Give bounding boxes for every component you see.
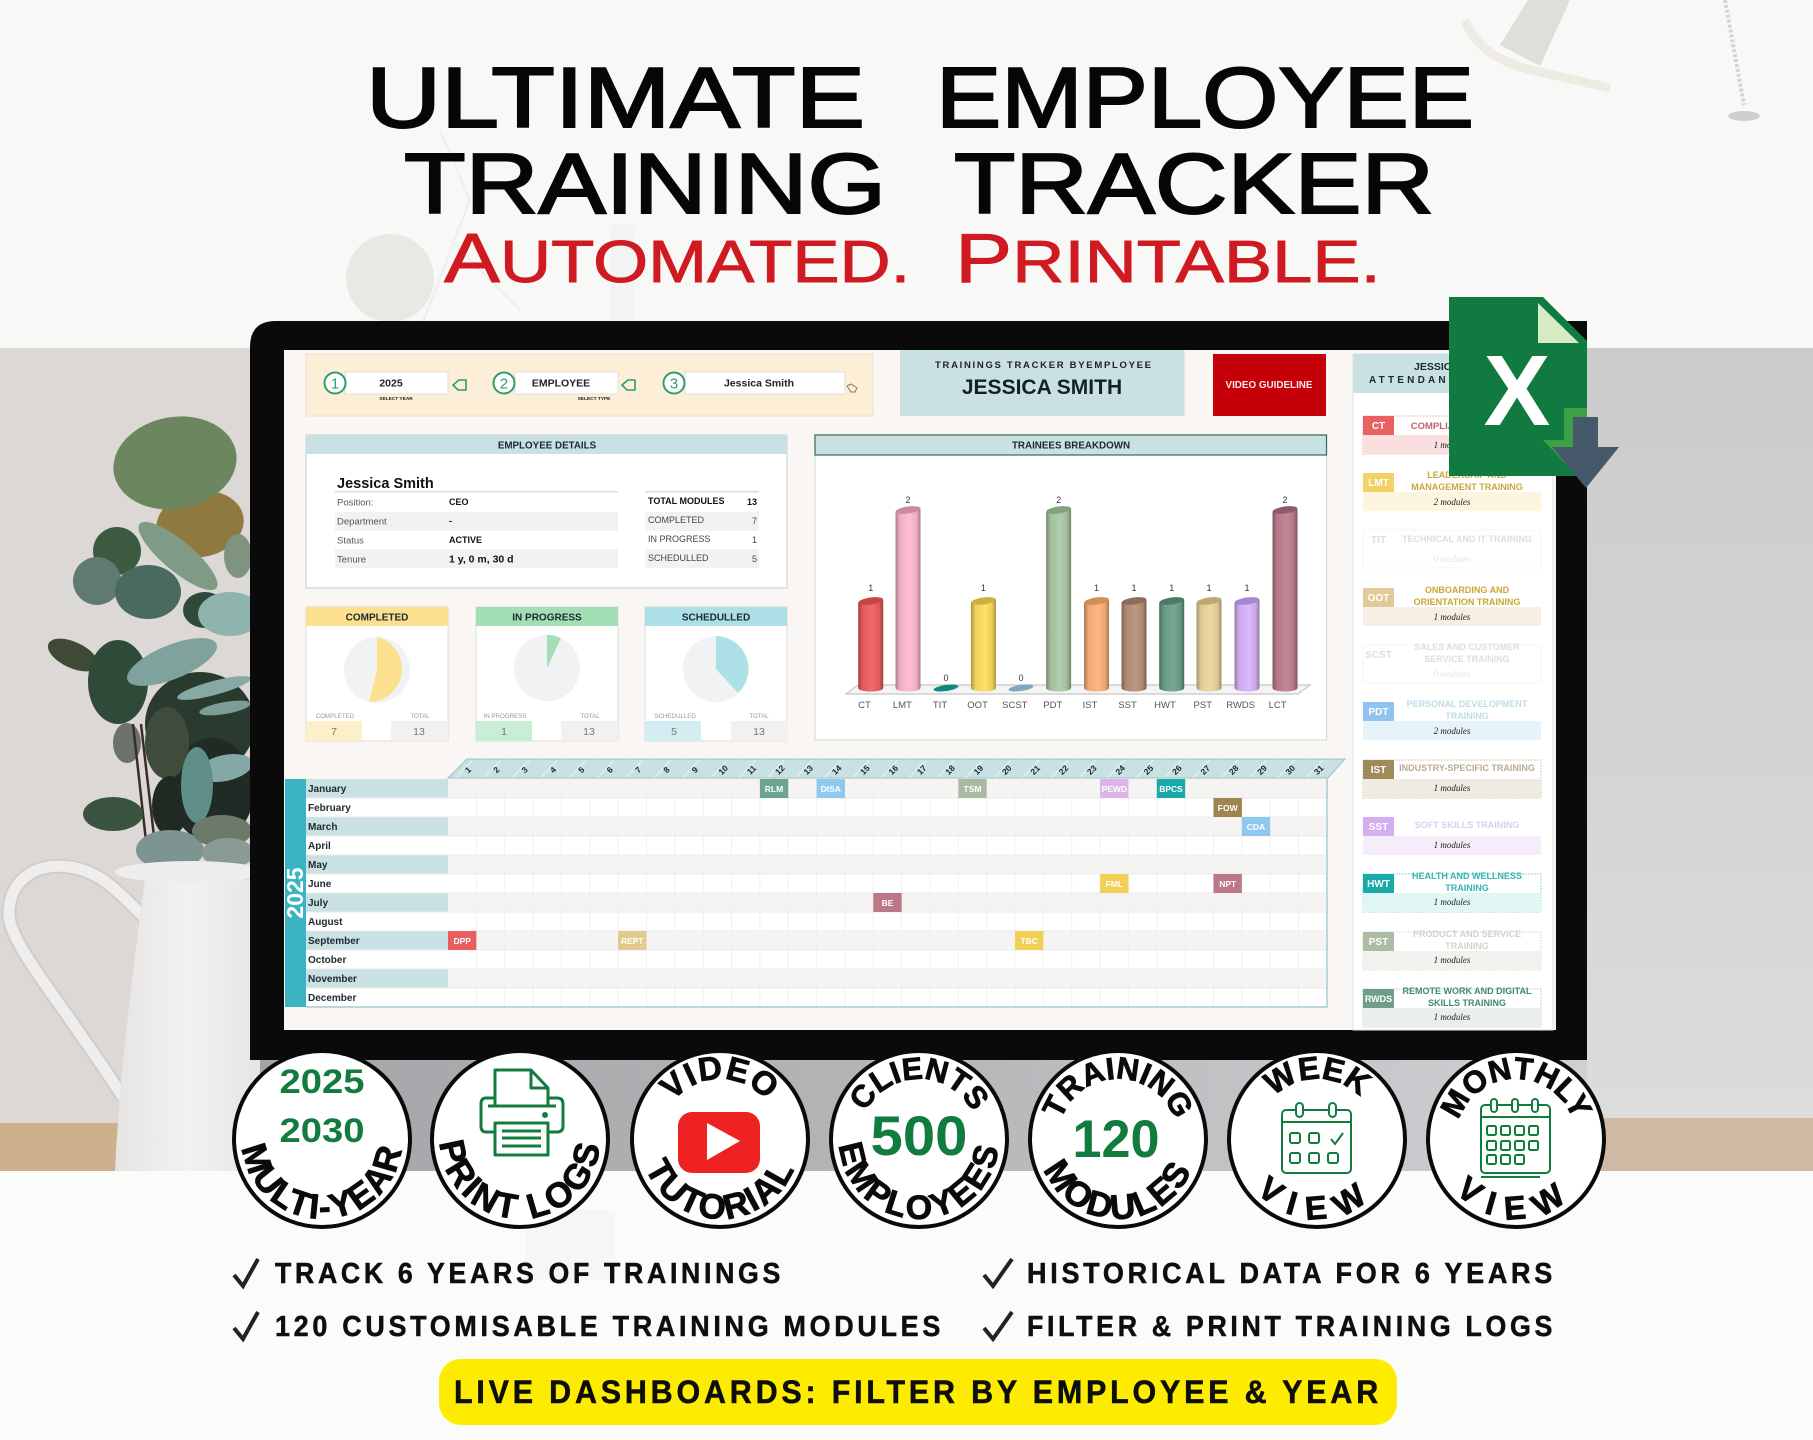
day header strip: 14 xyxy=(830,763,844,777)
card: SCST: SCST xyxy=(1365,650,1392,661)
panel: tracker heading: TRAININGS TRACKER BYEMPLOYEE xyxy=(935,360,1151,371)
day header strip: 3 xyxy=(519,764,530,775)
day header strip: 19 xyxy=(971,763,985,777)
subtitle: AUTOMATED. xyxy=(444,220,910,297)
card: LMT: MANAGEMENT TRAINING xyxy=(1411,482,1523,492)
day header strip: 13 xyxy=(801,763,815,777)
day header strip: 2 xyxy=(491,764,502,775)
badge: clients employees xyxy=(829,1053,1009,1229)
chart: 3D bars by training type: 1 xyxy=(1244,583,1250,593)
panel: in progress: TOTAL xyxy=(580,713,600,720)
card: HWT: HEALTH AND WELLNESS xyxy=(1412,871,1522,881)
panel: employee details: - xyxy=(449,516,452,526)
card: TIT: TECHNICAL AND IT TRAINING xyxy=(1402,534,1532,544)
panel: employee details: 7 xyxy=(752,516,757,526)
chart: 3D bars by training type: TIT xyxy=(933,700,947,711)
chart: 3D bars by training type: LMT xyxy=(893,700,912,711)
year band xyxy=(282,779,308,1007)
badge: week view: WEEK xyxy=(1260,1056,1374,1097)
icon: play button xyxy=(678,1112,760,1173)
panel: employee details: CEO xyxy=(449,497,469,507)
panel: completed: TOTAL xyxy=(410,713,430,720)
panel: yearly training calendar xyxy=(282,759,1345,1007)
card: TIT: TIT xyxy=(1371,535,1386,546)
card: SST: 1 modules xyxy=(1434,840,1471,850)
scheduled training events: BE xyxy=(882,898,894,908)
panel: employee details: 13 xyxy=(747,497,757,507)
card: PDT: PERSONAL DEVELOPMENT xyxy=(1407,699,1528,709)
chart: 3D bars by training type: 1 xyxy=(868,583,873,593)
day header strip: 10 xyxy=(716,763,730,777)
panel: tracker heading xyxy=(900,350,1184,416)
card: SCST xyxy=(1363,642,1541,683)
card: SCST: SERVICE TRAINING xyxy=(1424,654,1510,664)
icon: jug xyxy=(9,861,265,1171)
panel: completed: COMPLETED xyxy=(346,612,408,624)
chart: 3D bars by training type: LCT xyxy=(1269,700,1287,711)
scheduled training events: REPT xyxy=(621,936,644,946)
badge: video tutorial xyxy=(630,1053,810,1229)
chart: 3D bars by training type: 0 xyxy=(943,673,949,683)
panel: employee details: 1 y, 0 m, 30 d xyxy=(449,554,514,566)
day header strip: 8 xyxy=(661,764,672,775)
chart: 3D bars by training type: PDT xyxy=(1043,700,1062,711)
panel: employee details: Tenure xyxy=(337,554,366,566)
card: CT xyxy=(1363,416,1541,454)
chart: 3D bars by training type: 1 xyxy=(1169,583,1174,593)
panel: tracker heading: JESSICA SMITH xyxy=(962,376,1122,399)
icon: printer xyxy=(481,1070,563,1155)
month labels: September xyxy=(308,936,360,947)
title: EMPLOYEE xyxy=(936,51,1474,146)
panel: completed: COMPLETED xyxy=(316,713,355,720)
year band: 2025 xyxy=(282,867,308,919)
badge: week view xyxy=(1227,1053,1407,1229)
card: TIT xyxy=(1363,530,1541,568)
card: TIT: 0 modules xyxy=(1434,554,1471,564)
feature list: TRACK 6 YEARS OF TRAININGS xyxy=(275,1258,784,1290)
panel: completed: 7 xyxy=(331,726,337,738)
scheduled training events: BPCS xyxy=(1159,784,1183,794)
chart: 3D bars by training type: CT xyxy=(858,700,871,711)
card: PST xyxy=(1363,929,1541,970)
monitor frame xyxy=(250,321,1587,1060)
card: OOT xyxy=(1363,585,1541,626)
card: PDT: TRAINING xyxy=(1445,711,1489,721)
badge: clients employees: CLIENTS xyxy=(851,1056,988,1109)
panel: attendance sidebar: ATTENDANCE xyxy=(1369,375,1469,386)
month labels: November xyxy=(308,974,357,985)
badge: training modules: TRAINING xyxy=(1041,1056,1192,1117)
scheduled training events: NPT xyxy=(1219,879,1237,889)
chart: 3D bars by training type: OOT xyxy=(967,700,988,711)
chart: 3D bars by training type: 2 xyxy=(905,495,911,505)
chart: 3D bars by training type: 2 xyxy=(1282,495,1288,505)
badge: video tutorial: VIDEO xyxy=(657,1056,777,1096)
icon: excel file with download arrow: X xyxy=(1484,335,1550,447)
panel: schedulled: 13 xyxy=(753,726,765,738)
card: RWDS: SKILLS TRAINING xyxy=(1428,998,1506,1008)
chart: 3D bars by training type: 1 xyxy=(1131,583,1137,593)
month labels: January xyxy=(308,784,347,795)
day header strip: 28 xyxy=(1227,763,1241,777)
subtitle: PRINTABLE. xyxy=(955,219,1381,297)
scheduled training events: RLM xyxy=(765,784,783,794)
badge: monthly view xyxy=(1426,1053,1606,1229)
chart: completed pie xyxy=(344,637,410,703)
panel: employee details: Status xyxy=(337,536,364,546)
card: PST: PST xyxy=(1369,937,1388,948)
card: RWDS: 1 modules xyxy=(1434,1012,1471,1022)
card: PST: 1 modules xyxy=(1434,955,1471,965)
chart: 3D bars by training type: SST xyxy=(1118,700,1137,711)
panel: employee details: ACTIVE xyxy=(449,535,482,545)
icon: monthly calendar xyxy=(1481,1099,1550,1177)
badge: multi-year: 2025 xyxy=(280,1063,364,1101)
panel: filter selectors: 2025 xyxy=(379,378,403,390)
chart: 3D bars by training type: PST xyxy=(1194,700,1212,711)
scheduled training events: TBC xyxy=(1020,936,1038,946)
day header strip: 6 xyxy=(604,764,615,775)
title: TRACKER xyxy=(954,137,1434,232)
chart: 3D bars by training type: 0 xyxy=(1018,673,1024,683)
day header strip: 12 xyxy=(773,763,787,777)
card: CT: COMPLIANCE TRAINING xyxy=(1411,421,1523,432)
card: HWT: HWT xyxy=(1367,879,1390,890)
month labels: February xyxy=(308,803,351,814)
badge: multi-year: 2030 xyxy=(280,1112,364,1150)
panel: schedulled: SCHEDULLED xyxy=(654,713,696,720)
scheduled training events xyxy=(448,779,1270,950)
day header strip: 24 xyxy=(1113,763,1127,777)
panel: schedulled: SCHEDULLED xyxy=(682,612,750,624)
panel: employee details: Jessica Smith xyxy=(337,476,434,492)
badge: training modules: 120 xyxy=(1072,1110,1160,1169)
card: PST: PRODUCT AND SERVICE xyxy=(1413,929,1521,939)
day header strip: 22 xyxy=(1057,763,1071,777)
card: SST: SST xyxy=(1369,822,1388,833)
day header strip: 21 xyxy=(1028,763,1042,777)
panel: filter selectors: 1 xyxy=(331,376,339,392)
card: SCST: SALES AND CUSTOMER xyxy=(1414,642,1520,652)
card: PST: TRAINING xyxy=(1445,941,1489,951)
scheduled training events: DISA xyxy=(821,784,841,794)
feature list xyxy=(234,1258,1556,1343)
day header strip: 17 xyxy=(915,763,929,777)
chart: 3D bars by training type: RWDS xyxy=(1226,700,1255,711)
day header strip: 7 xyxy=(633,764,643,775)
day header strip: 4 xyxy=(548,764,558,775)
chart: 3D bars by training type xyxy=(846,495,1310,711)
card: CT: CT xyxy=(1372,421,1385,432)
month labels: March xyxy=(308,822,337,833)
panel: in progress: IN PROGRESS xyxy=(484,713,526,720)
panel: employee details: SCHEDULLED xyxy=(648,553,709,563)
card: LMT: LEADERSHIP AND xyxy=(1427,470,1507,480)
day header strip: 20 xyxy=(1000,763,1014,777)
panel: filter selectors: 2 xyxy=(500,376,508,392)
scheduled training events: FOW xyxy=(1218,803,1239,813)
icon: weekly calendar xyxy=(1282,1103,1351,1173)
panel: in progress: IN PROGRESS xyxy=(512,612,582,624)
day header strip xyxy=(448,759,1345,778)
panel: filter selectors xyxy=(306,354,873,416)
month labels: July xyxy=(308,898,328,909)
panel: attendance sidebar: JESSICA xyxy=(1414,361,1459,373)
day header strip: 15 xyxy=(858,763,872,777)
chart: schedulled pie xyxy=(683,636,749,702)
day header strip: 5 xyxy=(576,764,587,775)
month labels: June xyxy=(308,879,332,890)
chart: 3D bars by training type: 1 xyxy=(1206,583,1212,593)
panel: employee details xyxy=(306,435,787,588)
scheduled training events: DPP xyxy=(453,936,471,946)
month labels: December xyxy=(308,993,356,1004)
panel: filter selectors: 3 xyxy=(670,376,678,392)
card: PDT: 2 modules xyxy=(1434,726,1471,736)
panel: in progress: 13 xyxy=(583,726,595,738)
badge: multi-year xyxy=(232,1053,412,1229)
day header strip: 18 xyxy=(943,763,957,777)
month labels: May xyxy=(308,860,328,871)
badge: monthly view: MONTHLY xyxy=(1440,1056,1594,1119)
badge: training modules xyxy=(1028,1053,1208,1229)
panel: schedulled xyxy=(645,607,788,741)
panel: filter selectors: SELECT YEAR xyxy=(379,396,413,402)
panel: employee details: COMPLETED xyxy=(648,515,705,525)
badge: print logs xyxy=(430,1053,610,1229)
day header strip: 29 xyxy=(1255,763,1269,777)
card: PDT: PDT xyxy=(1368,707,1388,718)
check icons xyxy=(234,1259,1012,1339)
icon: eucalyptus leaves xyxy=(43,407,262,870)
card: CT: 1 modules xyxy=(1434,440,1471,450)
panel: filter selectors: SELECT TYPE xyxy=(578,396,611,402)
chart: 3D bars by training type: 1 xyxy=(981,583,986,593)
chart: 3D bars by training type: 2 xyxy=(1056,495,1061,505)
icon: excel file with download arrow xyxy=(1449,297,1619,488)
title: ULTIMATE xyxy=(366,51,865,146)
card: HWT xyxy=(1363,871,1541,912)
card: OOT: 1 modules xyxy=(1434,612,1471,622)
panel: employee details: IN PROGRESS xyxy=(648,534,711,544)
panel: completed xyxy=(306,607,448,741)
card: LMT: LMT xyxy=(1368,478,1389,489)
badge: print logs: PRINT LOGS xyxy=(439,1140,600,1219)
panel: employee details: Department xyxy=(337,516,387,528)
scheduled training events: FML xyxy=(1106,879,1123,889)
day header strip: 27 xyxy=(1198,763,1212,777)
day header strip: 25 xyxy=(1142,763,1156,777)
panel: completed: 13 xyxy=(413,726,425,738)
card: RWDS: RWDS xyxy=(1365,994,1392,1004)
panel: schedulled: TOTAL xyxy=(749,713,769,720)
callout: live dashboards: LIVE DASHBOARDS: FILTER BY EMPLOYEE & YEAR xyxy=(454,1374,1382,1410)
callout: live dashboards xyxy=(439,1359,1397,1425)
month labels: April xyxy=(308,841,331,852)
scheduled training events: TSM xyxy=(964,784,981,794)
card: LMT: 2 modules xyxy=(1434,497,1471,507)
card: RWDS: REMOTE WORK AND DIGITAL xyxy=(1402,986,1532,996)
feature list: 120 CUSTOMISABLE TRAINING MODULES xyxy=(275,1311,944,1343)
card: HWT: 1 modules xyxy=(1434,897,1471,907)
chart: 3D bars by training type: SCST xyxy=(1002,700,1028,711)
month labels: August xyxy=(308,917,343,928)
card: OOT: ORIENTATION TRAINING xyxy=(1414,597,1520,607)
panel: trainees breakdown xyxy=(815,435,1326,740)
panel: trainees breakdown: TRAINEES BREAKDOWN xyxy=(1012,440,1130,452)
chart: 3D bars by training type: HWT xyxy=(1154,700,1176,711)
card: IST xyxy=(1363,760,1541,798)
badge: clients employees: EMPLOYEES xyxy=(838,1142,998,1220)
panel: filter selectors: EMPLOYEE xyxy=(532,378,590,390)
card: LMT xyxy=(1363,470,1541,511)
scheduled training events: PEWD xyxy=(1102,784,1127,794)
day header strip: 11 xyxy=(745,763,758,777)
panel: employee details: TOTAL MODULES xyxy=(648,496,724,506)
day header strip: 1 xyxy=(463,764,473,775)
button: video guideline: VIDEO GUIDELINE xyxy=(1226,380,1313,391)
scheduled training events: CDA xyxy=(1247,822,1265,832)
card: IST: INDUSTRY-SPECIFIC TRAINING xyxy=(1399,763,1535,773)
badge: training modules: MODULES xyxy=(1043,1158,1189,1220)
card: RWDS xyxy=(1363,986,1541,1027)
card: IST: IST xyxy=(1371,765,1386,776)
card: OOT: ONBOARDING AND xyxy=(1425,585,1510,595)
button: video guideline xyxy=(1213,354,1326,416)
feature list: HISTORICAL DATA FOR 6 YEARS xyxy=(1027,1258,1556,1290)
panel: employee details: Position: xyxy=(337,498,373,508)
month labels xyxy=(308,784,360,1004)
panel: in progress xyxy=(476,607,618,741)
grid rows xyxy=(306,778,1327,1007)
panel: attendance sidebar xyxy=(1353,354,1553,1030)
chart: 3D bars by training type: 1 xyxy=(1094,583,1099,593)
subtitle xyxy=(444,219,1381,297)
badge: clients employees: 500 xyxy=(870,1104,968,1167)
badge: video tutorial: TUTORIAL xyxy=(648,1156,794,1220)
month labels: October xyxy=(308,955,346,966)
card: SST xyxy=(1363,817,1541,855)
badge: week view: VIEW xyxy=(1262,1174,1364,1220)
day header strip: 23 xyxy=(1085,763,1099,777)
dashboard screen xyxy=(282,350,1556,1030)
card: SST: SOFT SKILLS TRAINING xyxy=(1415,820,1519,830)
panel: in progress: 1 xyxy=(501,726,507,738)
title: TRAINING xyxy=(404,137,886,232)
day header strip: 9 xyxy=(690,764,700,775)
chart: in progress pie xyxy=(514,635,580,701)
card: HWT: TRAINING xyxy=(1445,883,1489,893)
feature list: FILTER & PRINT TRAINING LOGS xyxy=(1027,1311,1556,1343)
day header strip: 26 xyxy=(1170,763,1184,777)
chart: 3D bars by training type: IST xyxy=(1083,700,1098,711)
badge: monthly view: VIEW xyxy=(1461,1174,1563,1220)
decoration: plant in white jug xyxy=(9,407,265,1171)
panel: filter selectors: Jessica Smith xyxy=(724,378,794,390)
badge: multi-year: MULTI-YEAR xyxy=(241,1142,402,1219)
title xyxy=(366,51,1474,232)
card: SCST: 0 modules xyxy=(1434,669,1471,679)
day header strip: 16 xyxy=(886,763,900,777)
panel: employee details: 5 xyxy=(752,554,757,564)
panel: employee details: 1 xyxy=(752,535,757,545)
panel: employee details: EMPLOYEE DETAILS xyxy=(498,440,597,452)
panel: schedulled: 5 xyxy=(671,726,677,738)
day header strip: 31 xyxy=(1312,763,1326,777)
card: IST: 1 modules xyxy=(1434,783,1471,793)
card: OOT: OOT xyxy=(1368,593,1389,604)
card: PDT xyxy=(1363,699,1541,740)
day header strip: 30 xyxy=(1283,763,1297,777)
